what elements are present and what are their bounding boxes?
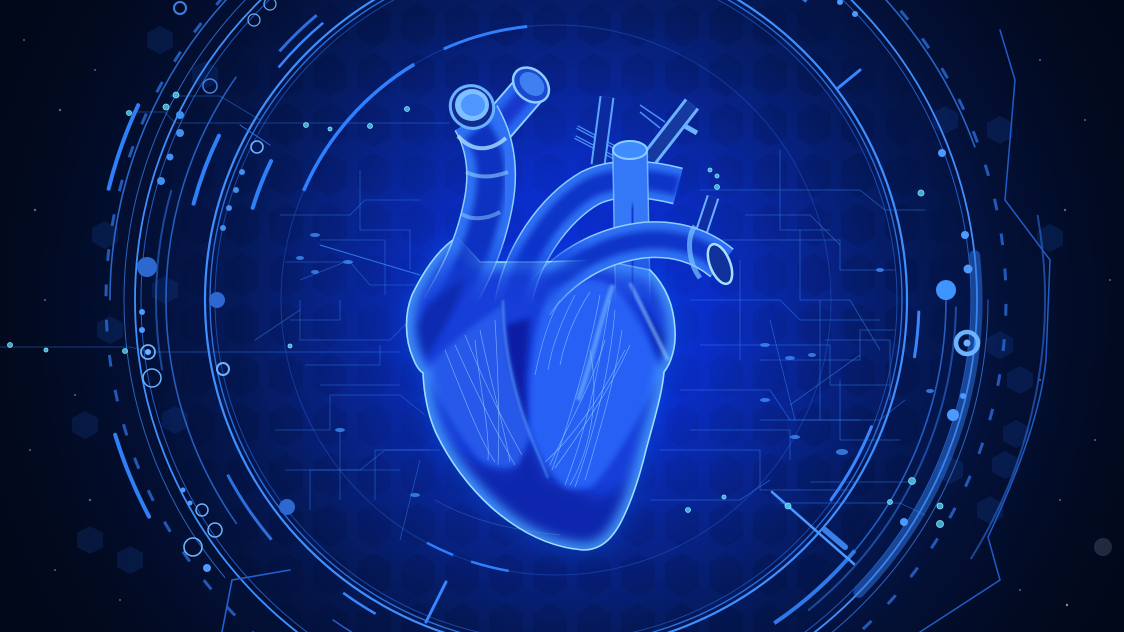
vessel opening: right tube bbox=[506, 60, 556, 110]
heart bbox=[406, 60, 737, 560]
right ventricle lobe bbox=[530, 280, 662, 489]
hexagon texture bbox=[247, 4, 917, 632]
circuit traces right bbox=[650, 150, 925, 515]
ventricle fibres bbox=[435, 292, 630, 535]
ascending vessel bbox=[613, 141, 647, 310]
ventricle dark strip bbox=[505, 318, 530, 425]
aortic arch bbox=[512, 179, 678, 310]
pulmonary artery bbox=[535, 226, 737, 305]
small vessels behind the arch bbox=[575, 97, 713, 236]
diagonal highlights and outer frame lines bbox=[222, 30, 1050, 632]
right chamber diagonal band bbox=[630, 283, 668, 360]
circuit solder pads bbox=[296, 233, 934, 497]
scattered hexagons in outer space bbox=[72, 26, 1063, 574]
cyan data dots bbox=[8, 92, 944, 528]
left ventricle lobe bbox=[425, 305, 530, 468]
heart body bbox=[406, 237, 675, 550]
heart outline bbox=[406, 237, 675, 550]
inner rim bbox=[406, 237, 675, 550]
circuit traces left bbox=[0, 96, 450, 540]
septal bright ridge bbox=[578, 285, 613, 400]
ring nodes and markers bbox=[137, 0, 978, 556]
left septum line bbox=[503, 300, 548, 478]
atrium dark pockets bbox=[415, 278, 465, 360]
vessel opening: left tube bbox=[442, 77, 502, 137]
superior vena cava tube bbox=[445, 85, 533, 310]
outer heart glow bbox=[406, 237, 675, 550]
body shading and rim light bbox=[406, 237, 675, 560]
ring dots bbox=[139, 0, 972, 572]
apex shading bbox=[454, 443, 632, 549]
